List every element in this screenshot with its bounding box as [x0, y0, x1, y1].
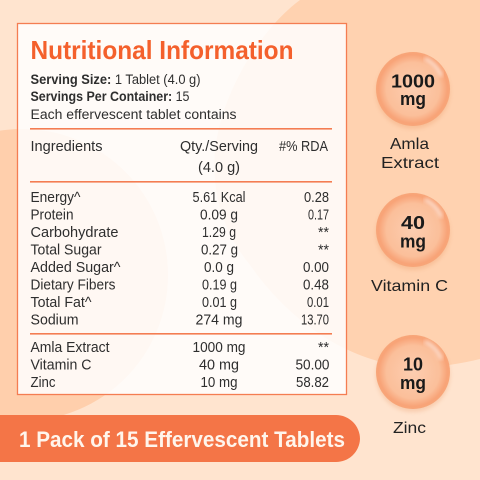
- table header: (4.0 g): [198, 160, 240, 176]
- RDA values: **: [318, 242, 329, 258]
- quantities: 0.19 g: [202, 278, 237, 294]
- quantities: 1000 mg: [192, 340, 246, 356]
- RDA values: 13.70: [301, 312, 329, 328]
- title: Nutritional Information: [30, 35, 294, 65]
- label: amla extract: [381, 136, 440, 172]
- ingredient names: Protein: [30, 208, 74, 224]
- quantities: 1.29 g: [202, 225, 236, 241]
- RDA values: 50.00: [296, 358, 330, 374]
- RDA values: 0.01: [307, 295, 329, 311]
- icon: amla capsule: 1000: [391, 72, 435, 92]
- quantities: [192, 190, 246, 391]
- ingredient names: Total Fat^: [30, 295, 92, 311]
- banner: [0, 415, 360, 462]
- label: vitamin c: Vitamin C: [371, 278, 448, 295]
- icon: zinc capsule: mg: [400, 373, 426, 393]
- table header: #% RDA: [279, 139, 328, 155]
- RDA values: [296, 190, 330, 391]
- serving details: Each effervescent tablet contains: [30, 107, 237, 122]
- RDA values: **: [318, 225, 329, 241]
- RDA values: **: [318, 340, 329, 356]
- ingredient names: Sodium: [30, 312, 78, 328]
- panel: nutritional information: [18, 24, 346, 394]
- table header: Qty./Serving: [180, 139, 258, 155]
- quantities: 0.01 g: [202, 295, 237, 311]
- icon: amla capsule: mg: [400, 89, 426, 109]
- serving details: [30, 72, 237, 122]
- banner: 1 Pack of 15 Effervescent Tablets: [19, 427, 345, 452]
- serving details: Serving Size: 1 Tablet (4.0 g): [30, 72, 200, 87]
- ingredient names: Added Sugar^: [30, 260, 121, 276]
- ingredient names: Amla Extract: [30, 340, 110, 356]
- RDA values: 0.28: [304, 190, 329, 206]
- table header: [30, 139, 328, 176]
- ingredient names: [30, 190, 121, 391]
- icon: zinc capsule: [376, 335, 450, 412]
- ingredient names: Carbohydrate: [30, 225, 119, 241]
- label: zinc: Zinc: [393, 420, 426, 437]
- quantities: 274 mg: [196, 312, 242, 328]
- quantities: 40 mg: [199, 358, 239, 374]
- icon: zinc capsule: 10: [403, 354, 423, 374]
- quantities: 5.61 Kcal: [192, 190, 246, 206]
- serving details: Servings Per Container: 15: [30, 89, 190, 104]
- icon: vitamin c capsule: [376, 193, 450, 270]
- RDA values: 0.48: [303, 278, 329, 294]
- ingredient names: Total Sugar: [30, 242, 102, 258]
- table header: Ingredients: [30, 139, 102, 155]
- icon: amla capsule: [376, 52, 450, 129]
- icon: vitamin c capsule: 40: [401, 213, 425, 233]
- label: amla extract: Extract: [381, 155, 440, 172]
- quantities: 10 mg: [200, 375, 238, 391]
- ingredient names: Energy^: [30, 190, 81, 206]
- quantities: 0.27 g: [201, 242, 238, 258]
- quantities: 0.0 g: [204, 260, 234, 276]
- icon: vitamin c capsule: mg: [400, 232, 426, 252]
- RDA values: 58.82: [296, 375, 329, 391]
- RDA values: 0.00: [303, 260, 329, 276]
- ingredient names: Dietary Fibers: [30, 278, 116, 294]
- ingredient names: Vitamin C: [30, 358, 92, 374]
- label: amla extract: Amla: [390, 136, 429, 153]
- ingredient names: Zinc: [30, 375, 56, 391]
- RDA values: 0.17: [308, 208, 329, 224]
- quantities: 0.09 g: [200, 208, 238, 224]
